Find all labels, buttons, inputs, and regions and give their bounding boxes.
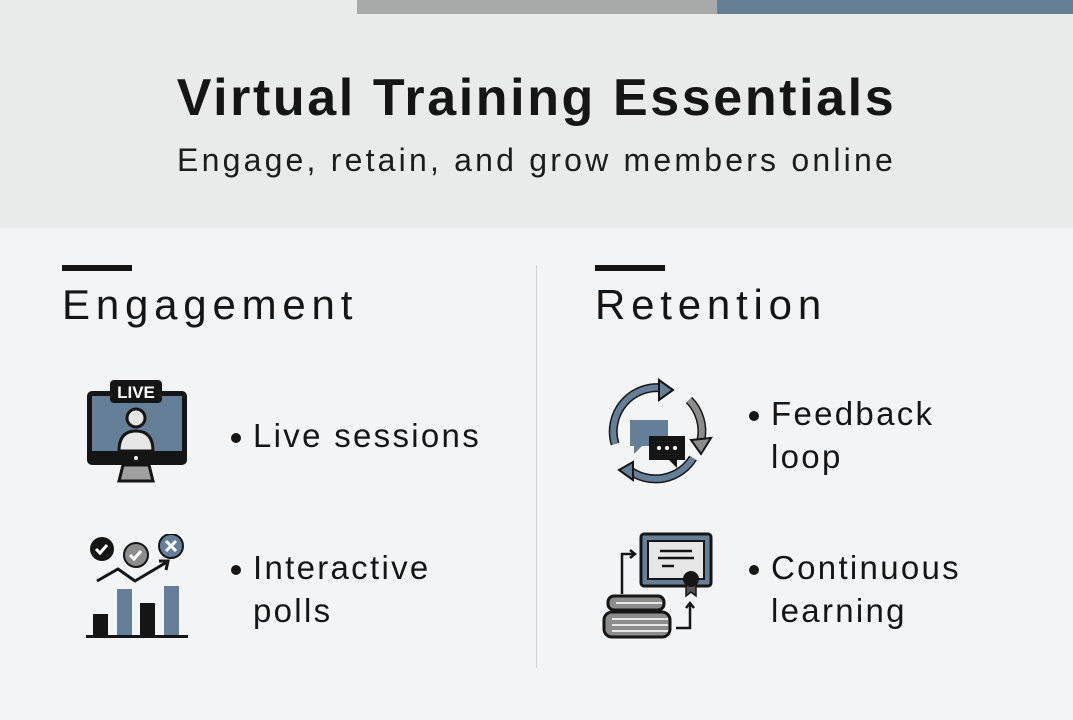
- panel: engagement: [62, 265, 481, 638]
- icon: continuous learning: [602, 532, 712, 638]
- column divider: [536, 265, 537, 668]
- icon: polls chart: [86, 534, 188, 638]
- text: Feedback loop: loop: [771, 438, 843, 475]
- icon: feedback loop: [608, 378, 713, 484]
- text: Live sessions: Live sessions: [253, 417, 481, 454]
- text: Continuous learning: [749, 549, 961, 629]
- header band: [0, 0, 1073, 228]
- text: Interactive polls: polls: [253, 592, 332, 629]
- text: Interactive polls: [231, 549, 431, 629]
- text: Interactive polls: Interactive: [253, 549, 431, 586]
- subtitle: Engage, retain, and grow members online: [177, 142, 896, 178]
- top bar: blue: [717, 0, 1073, 14]
- heading: Retention: Retention: [595, 281, 827, 328]
- heading accent: [62, 265, 132, 271]
- icon: live monitor: [87, 380, 187, 482]
- panel: retention: [595, 265, 961, 638]
- icon: live monitor: LIVE: [117, 383, 155, 402]
- text: Continuous learning: Continuous: [771, 549, 961, 586]
- top bar: gray: [357, 0, 717, 14]
- title: Virtual Training Essentials: [177, 69, 896, 127]
- heading accent: [595, 265, 665, 271]
- heading: Engagement: Engagement: [62, 281, 358, 328]
- text: Continuous learning: learning: [771, 592, 907, 629]
- text: Feedback loop: Feedback: [771, 395, 934, 432]
- text: Feedback loop: [749, 395, 934, 475]
